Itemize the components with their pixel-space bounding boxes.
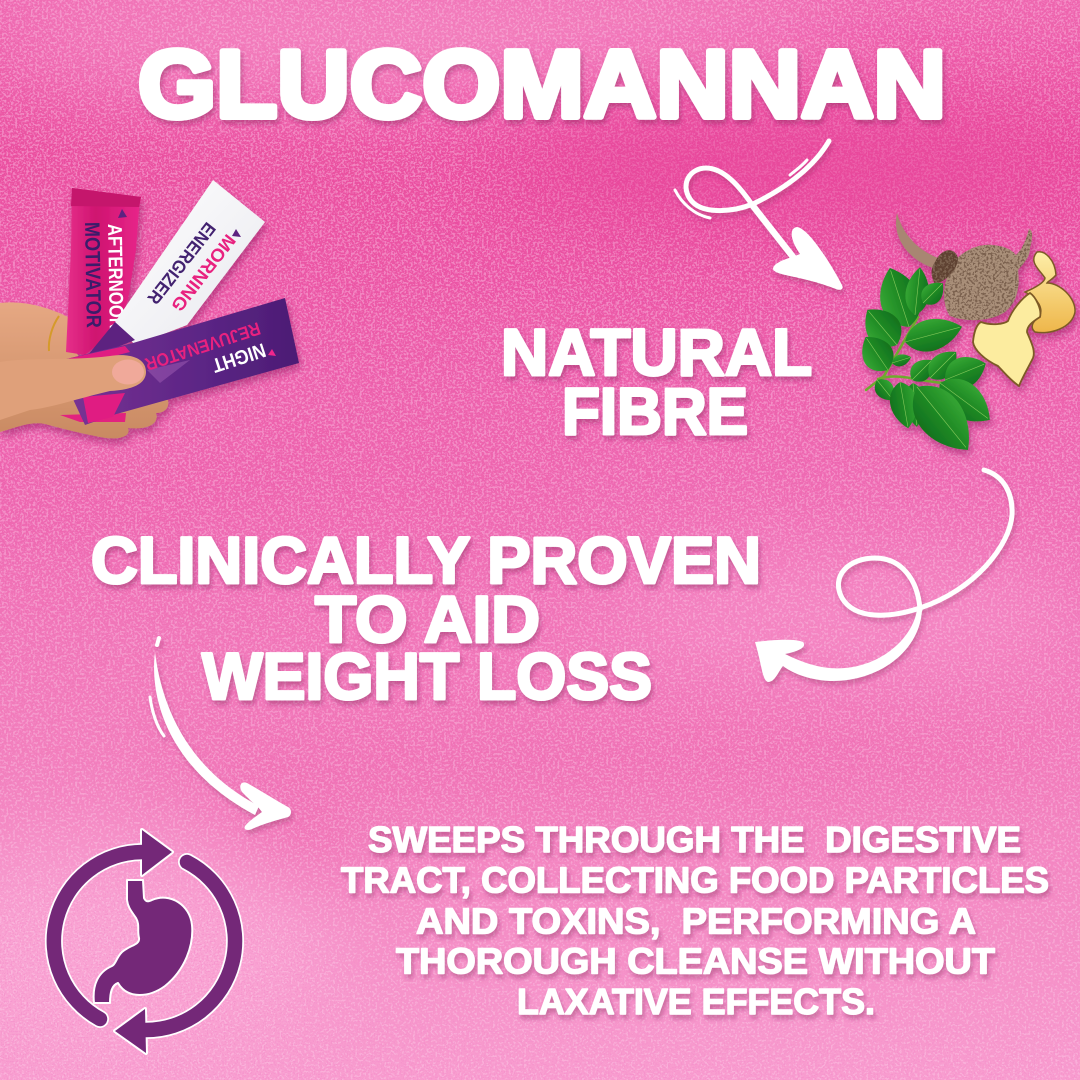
sachet: afternoon motivator: AFTERNOON (103, 224, 127, 330)
text block: digestive cleanse: THOROUGH CLEANSE WITHOUT (396, 940, 995, 982)
text block: digestive cleanse: SWEEPS THROUGH THE DIGESTIVE (368, 819, 1021, 860)
heading: natural fibre: NATURAL (501, 315, 812, 389)
arrow: weight loss to digestive (150, 638, 291, 830)
right slice (1025, 252, 1075, 333)
sachet: night rejuvenator: REJUVENATOR (143, 318, 263, 374)
cycle arrow: bottom (115, 862, 235, 1053)
icon: stomach with cycle arrows (54, 830, 235, 1053)
arrow: natural fibre to weight loss (755, 470, 1012, 682)
sachet: afternoon motivator (60, 188, 141, 422)
sachet: morning energizer: ENERGIZER (144, 219, 220, 308)
thumbnail (112, 360, 144, 384)
front slice (973, 293, 1040, 386)
thumb (0, 355, 146, 420)
hand back and fingers (0, 302, 168, 438)
image: hand holding sachets (0, 180, 299, 438)
heading: clinically proven to aid weight loss: WEIGHT LOSS (202, 639, 652, 713)
leaves (853, 262, 1001, 464)
heading: clinically proven to aid weight loss: CLINICALLY PROVEN (91, 523, 761, 597)
heading: clinically proven to aid weight loss: TO AID (315, 582, 540, 656)
konjac horn (896, 213, 938, 268)
stomach (94, 880, 192, 1003)
heading: natural fibre: FIBRE (562, 374, 748, 448)
konjac root (944, 229, 1032, 320)
root knob (932, 250, 958, 284)
image: konjac root and leaves (853, 213, 1075, 464)
text block: digestive cleanse: TRACT, COLLECTING FOOD PARTICLES (341, 860, 1049, 900)
sachet: morning energizer (88, 180, 265, 355)
sachet: afternoon motivator: MOTIVATOR (80, 222, 105, 328)
heading: natural fibre (501, 315, 812, 448)
text block: digestive cleanse: LAXATIVE EFFECTS. (517, 981, 875, 1022)
text block: digestive cleanse (341, 819, 1049, 1022)
sachet: night rejuvenator (62, 298, 299, 425)
text block: digestive cleanse: AND TOXINS, PERFORMING A (416, 900, 976, 942)
sachet: night rejuvenator: NIGHT (209, 338, 268, 376)
stems (866, 317, 945, 390)
ring (49, 316, 59, 351)
heading: clinically proven to aid weight loss (91, 523, 761, 713)
arrow: title to natural fibre (675, 141, 843, 290)
sachet: morning energizer: MORNING (167, 231, 240, 315)
cycle arrow: top (54, 830, 172, 1019)
title: GLUCOMANNAN (138, 31, 946, 138)
